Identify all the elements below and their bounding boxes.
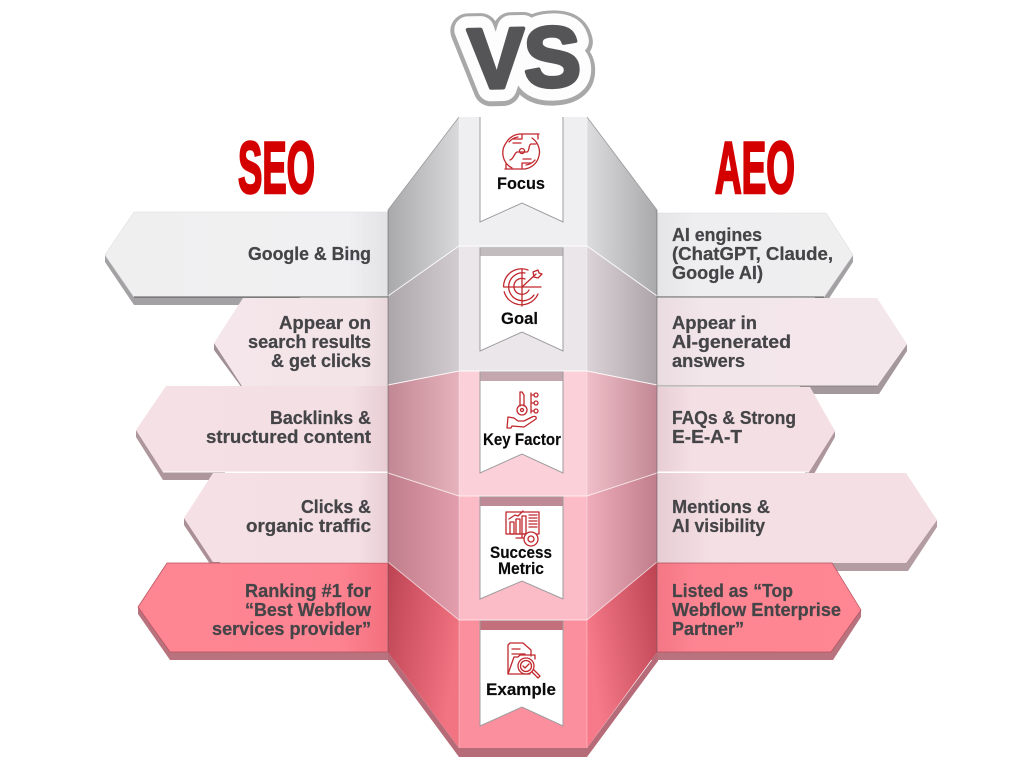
card: Listed as: Partner” [672,618,744,639]
band: focus [388,117,657,296]
card: Appear in: Appear in [672,312,757,333]
ribbon: Success Metric [480,497,563,599]
card: Appear on search results: search results [248,331,371,352]
card: Ranking [138,563,395,660]
card: Clicks: organic traffic [246,515,371,536]
card: Appear on search results: & get clicks [271,350,371,371]
card: Ranking: Ranking #1 for [245,580,371,601]
card: Clicks [184,473,390,564]
ribbon: Success Metric: Metric [498,560,544,578]
card: Backlinks: Backlinks & [270,407,371,428]
ribbon: Goal [480,248,563,351]
vs badge: VS [467,9,582,107]
card: FAQs: FAQs & Strong [672,407,796,428]
band: success metric [388,473,657,620]
card: Mentions [655,473,937,571]
icon: dashboard [506,511,539,546]
card: Appear on search results [214,298,390,388]
card: FAQs [655,387,835,474]
band: example [388,562,657,748]
card: Google & Bing: Google & Bing [248,243,371,264]
icon: target [504,269,542,306]
ribbon: Key Factor [480,372,563,473]
heading: AEO: AEO [715,128,795,209]
card: Appear on search results: Appear on [279,312,371,333]
card: Listed as [650,563,861,660]
card: Listed as: Webflow Enterprise [672,599,841,620]
card: AI engines: AI engines [672,224,762,245]
card: Ranking: “Best Webflow [245,599,372,620]
icon: focus [503,134,539,169]
card: AI engines: (ChatGPT, Claude, [672,243,833,264]
ribbon: Example [480,621,563,726]
card: AI engines: Google AI) [672,262,763,283]
card: Appear in: answers [672,350,745,371]
card: Mentions: AI visibility [672,515,766,536]
card: Backlinks: structured content [206,426,371,447]
band: goal [388,246,657,385]
card: Google & Bing [105,212,390,305]
card: Clicks: Clicks & [301,496,371,517]
card: FAQs: E-E-A-T [672,426,743,447]
ribbon: Key Factor: Key Factor [483,431,562,449]
card: Appear in: AI-generated [672,331,791,352]
panel: AEO cards [650,213,937,660]
ribbon: Focus [480,117,563,222]
card: Mentions: Mentions & [672,496,770,517]
card: Ranking: services provider” [212,618,371,639]
vs badge: VS [467,9,582,107]
ribbon: Goal: Goal [501,310,538,328]
ribbon: Focus: Focus [497,175,545,193]
card: Appear in [655,298,907,394]
card: Listed as: Listed as “Top [672,580,793,601]
icon: document search [508,643,540,678]
panel: SEO cards [105,212,395,660]
column base depth [388,652,658,757]
vs badge: VS [467,10,582,108]
panel: central column [388,117,658,757]
ribbon: Example: Example [486,681,556,699]
icon: key and hand [507,392,538,428]
band: key factor [388,371,657,496]
card: Backlinks [136,386,390,480]
text: SEO [238,128,315,209]
ribbon: Success Metric: Success [490,544,552,562]
card: AI engines [655,213,853,303]
